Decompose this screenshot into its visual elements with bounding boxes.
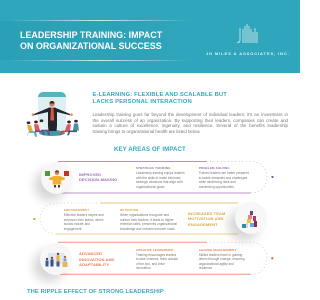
text: resilience.: [199, 266, 213, 270]
ribbon top highlight: [8, 20, 193, 21]
heading: key areas of impact: KEY AREAS OF IMPACT: [114, 146, 186, 153]
intro paragraph: Leadership training goes far beyond the development of individual leaders; it's an investment in: [92, 112, 288, 117]
text: to take chances, think outside: [136, 257, 178, 261]
row 1 circle: decision making: [40, 162, 72, 194]
text: Trained leaders are better prepared: [199, 171, 249, 175]
text: When organizations recognize and: [120, 213, 169, 217]
empowerment: [64, 208, 104, 231]
text: [198, 253, 245, 270]
intro paragraph: training brings to organizational health are listed below.: [92, 129, 201, 134]
title: LEADERSHIP TRAINING: IMPACT: [20, 30, 162, 40]
intro paragraph: sustain a culture of excellence, ingenuity, and resilience. Several of the benefits leadership: [92, 123, 288, 128]
text: [136, 253, 178, 270]
text: to tackle obstacles and challenges: [199, 176, 247, 180]
text: Leadership training equips leaders: [136, 171, 185, 175]
heading: ripple effect: THE RIPPLE EFFECT OF STRONG LEADERSHIP: [27, 289, 164, 295]
company name: JH MILES & ASSOCIATES, INC.: [206, 50, 290, 56]
row 1 title: IMPROVED: [79, 172, 101, 177]
label: CHANGE MANAGEMENT: [199, 248, 236, 252]
text: organizational agility and: [199, 262, 234, 266]
text: Effective leaders inspire and: [64, 213, 104, 217]
strategic thinking: [136, 166, 185, 189]
row 3 title: INNOVATION AND: [79, 257, 115, 262]
text: nurture their leaders, it leads to higher: [120, 218, 174, 222]
icon: innovators group: [46, 252, 68, 267]
row 1 title: [79, 172, 117, 182]
row 2 frame: [40, 203, 238, 234]
row 3 title: ADAPTABILITY: [79, 262, 109, 267]
row 2 title: ENGAGEMENT: [188, 222, 218, 227]
text: engagement.: [64, 227, 82, 231]
left attendees: [27, 119, 50, 138]
row 3 title: [79, 251, 115, 267]
text: [64, 213, 104, 231]
icon: person with choices: [45, 170, 69, 188]
row 1 frame: [58, 162, 267, 193]
trainer: [32, 101, 73, 131]
label: RETENTION: [120, 208, 138, 212]
row 3 circle: innovation: [40, 243, 72, 275]
row 1 title: DECISION-MAKING: [79, 177, 117, 182]
text: retention rates, preserves organizational: [120, 222, 177, 226]
text: empower their teams, which: [64, 218, 103, 222]
row 2 title: MOTIVATION AND: [188, 216, 224, 221]
section heading: e-learning: E-LEARNING: FLEXIBLE AND SCALABLE BUT: [92, 92, 227, 98]
text: Skilled leaders excel in guiding: [199, 253, 242, 257]
text: [136, 171, 185, 189]
retention: [120, 208, 177, 231]
row 2 node: [33, 218, 35, 220]
text: others through change, ensuring: [199, 257, 245, 261]
text: while minimizing risks and: [199, 180, 236, 184]
intro paragraph: the overall success of an organization. By supporting their leaders, companies can create and: [92, 118, 288, 123]
label: PROBLEM-SOLVING: [199, 166, 230, 170]
logo mark: [236, 24, 258, 43]
title ribbon: [0, 21, 195, 60]
text: of the box, and drive: [136, 262, 165, 266]
creative leadership: [136, 248, 178, 270]
label: STRATEGIC THINKING: [136, 166, 171, 170]
text: knowledge and reduces turnover costs.: [120, 227, 175, 231]
text: strategic decisions that align with: [136, 180, 183, 184]
row 3 title: ADVANCED: [79, 251, 102, 256]
problem solving: [198, 166, 249, 189]
title: ON ORGANIZATIONAL SUCCESS: [20, 40, 162, 50]
section heading: e-learning: LACKS PERSONAL INTERACTION: [92, 98, 192, 104]
row 3 node: [271, 257, 273, 259]
text: [120, 213, 177, 231]
text: boosts morale and: [64, 222, 90, 226]
row 2 circle: motivation: [235, 202, 267, 234]
text: organizational goals.: [136, 185, 165, 189]
row 2 title: [188, 211, 226, 227]
label: EMPOWERMENT: [64, 208, 89, 212]
text: innovation.: [136, 266, 151, 270]
text: Training encourages leaders: [136, 253, 176, 257]
table: [39, 130, 65, 136]
header banner: [0, 0, 300, 73]
text: maximizing opportunities.: [199, 185, 235, 189]
text: [198, 171, 249, 189]
change management: [198, 248, 245, 270]
row 3 frame: [58, 242, 267, 274]
board: [38, 92, 66, 130]
label: CREATIVE LEADERSHIP: [136, 248, 173, 252]
ribbon bottom highlight: [8, 60, 193, 61]
title: [20, 30, 162, 50]
row 1 node: [272, 176, 274, 178]
right attendees: [59, 120, 79, 135]
intro paragraph: [92, 112, 288, 134]
row 2 title: INCREASED TEAM: [188, 211, 225, 216]
illustration: trainer with seated team: [26, 92, 79, 137]
icon: team pyramid: [242, 211, 257, 228]
section heading: e-learning: [92, 92, 227, 104]
text: with the skills to make informed,: [136, 176, 181, 180]
